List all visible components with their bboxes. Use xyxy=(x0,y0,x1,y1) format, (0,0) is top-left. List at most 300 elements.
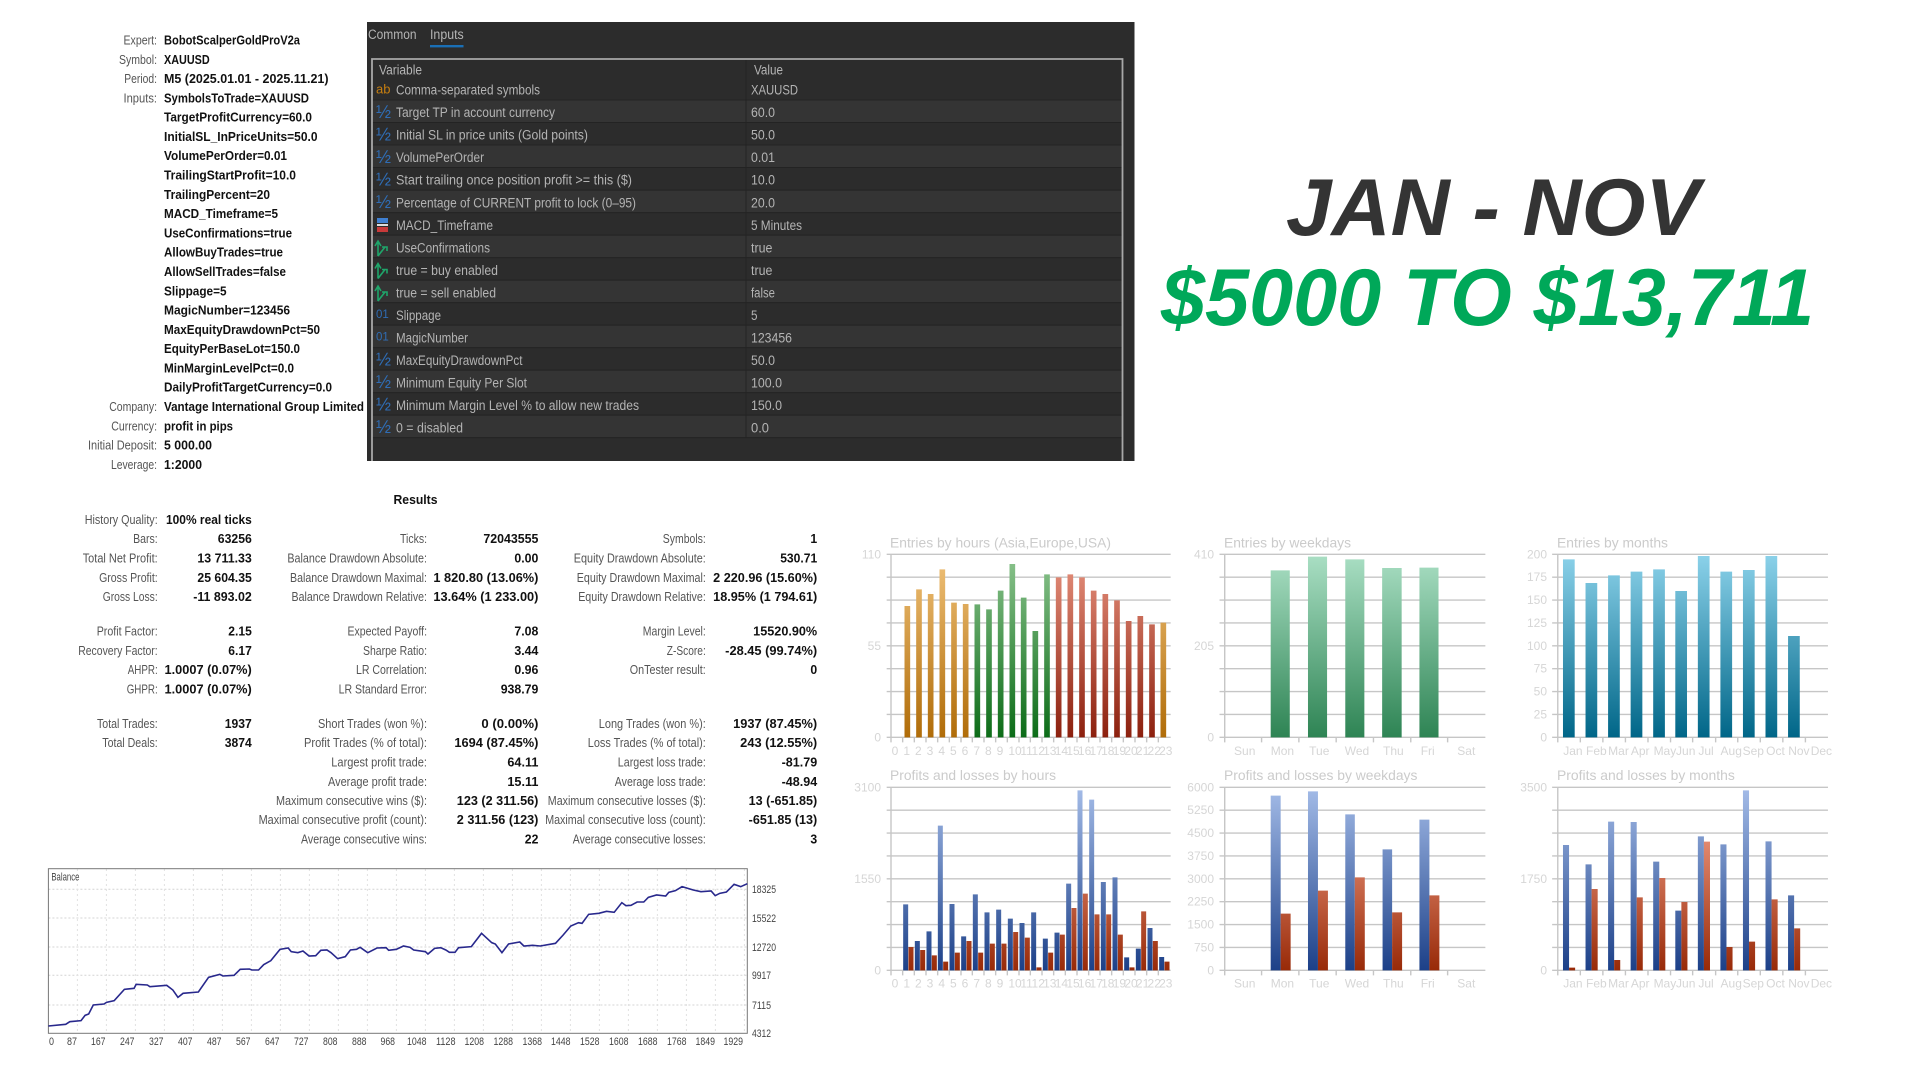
balance x axis: 1208 xyxy=(464,1036,484,1048)
x axis labels: Thu xyxy=(1383,744,1404,758)
column 3 values: 2 220.96 (15.60%) xyxy=(713,571,817,585)
plot xyxy=(887,787,1171,975)
column 2 labels: LR Correlation: xyxy=(356,663,427,677)
column 2 values: 7.08 xyxy=(514,624,538,638)
results heading: Results xyxy=(394,492,438,507)
y axis labels xyxy=(1187,780,1214,977)
column 3 labels: Symbols: xyxy=(663,532,706,546)
variable names: Variable xyxy=(379,63,422,78)
balance y axis: 4312 xyxy=(752,1028,771,1040)
setting values: InitialSL_InPriceUnits=50.0 xyxy=(164,130,318,144)
setting labels: Inputs: xyxy=(124,91,157,105)
icons: data types: ½ xyxy=(376,170,391,190)
column 1 values: 13 711.33 xyxy=(197,552,252,566)
x axis labels: 2 xyxy=(915,977,922,991)
column 3 values xyxy=(713,532,817,846)
balance x axis: 968 xyxy=(380,1036,395,1048)
x axis labels: 0 xyxy=(892,977,899,991)
column 2 labels: Balance Drawdown Relative: xyxy=(292,590,427,604)
x axis labels: 19 xyxy=(1113,744,1126,758)
column 2 values: 0.96 xyxy=(514,663,538,677)
column 2 values: 3.44 xyxy=(514,644,538,658)
x axis labels: Jun xyxy=(1676,977,1695,991)
column 2 labels: Profit Trades (% of total): xyxy=(304,736,427,750)
x axis labels: Nov xyxy=(1788,977,1810,991)
chart title: Profits and losses by weekdays xyxy=(1224,767,1417,783)
column 3 values: 13 (-651.85) xyxy=(749,794,817,808)
x axis labels: 16 xyxy=(1078,977,1092,991)
column 2 values: 1 820.80 (13.06%) xyxy=(433,571,538,585)
x axis labels: 20 xyxy=(1124,977,1138,991)
balance y axis: 15522 xyxy=(752,913,776,925)
x axis labels: 6 xyxy=(962,977,969,991)
x axis labels: Sep xyxy=(1743,744,1764,758)
column 3 values: -28.45 (99.74%) xyxy=(725,644,817,658)
setting values: XAUUSD xyxy=(164,53,210,67)
x axis labels: Feb xyxy=(1586,977,1607,991)
column 1 labels: Gross Loss: xyxy=(103,590,158,604)
balance x axis: 487 xyxy=(207,1036,222,1048)
variable names: VolumePerOrder xyxy=(396,150,484,165)
column 2 values: 123 (2 311.56) xyxy=(457,794,538,808)
column 3 labels: Equity Drawdown Absolute: xyxy=(574,552,706,566)
y axis labels: 75 xyxy=(1534,662,1547,676)
column 2 values: 13.64% (1 233.00) xyxy=(433,590,538,604)
plot xyxy=(1220,787,1485,975)
balance x axis: 1048 xyxy=(407,1036,426,1048)
column 1 values xyxy=(164,513,252,750)
plot xyxy=(1552,554,1828,742)
balance x axis: 1688 xyxy=(638,1036,658,1048)
x axis labels: 10 xyxy=(1008,977,1022,991)
variable names: MaxEquityDrawdownPct xyxy=(396,353,523,368)
balance x axis: 1528 xyxy=(580,1036,600,1048)
x axis labels: 22 xyxy=(1148,744,1161,758)
y axis labels: 0 xyxy=(1540,963,1547,977)
column 3 labels: Average loss trade: xyxy=(615,775,706,789)
column 3 labels: Z-Score: xyxy=(667,644,706,658)
column 2 labels: Ticks: xyxy=(400,532,427,546)
x axis labels: 2 xyxy=(915,744,922,758)
setting labels: Symbol: xyxy=(119,53,157,67)
variable names: Slippage xyxy=(396,308,441,323)
x axis labels: Jul xyxy=(1698,744,1714,758)
column 1 values: -11 893.02 xyxy=(193,590,252,604)
x axis labels: Wed xyxy=(1345,744,1369,758)
y axis labels: 1750 xyxy=(1520,872,1547,886)
balance x axis: 1768 xyxy=(667,1036,686,1048)
y axis labels: 50 xyxy=(1534,685,1547,699)
y axis labels: 175 xyxy=(1527,570,1547,584)
x axis labels: Apr xyxy=(1631,977,1650,991)
x axis labels: Tue xyxy=(1309,744,1330,758)
variable values: true xyxy=(751,263,772,278)
column 1 values: 25 604.35 xyxy=(197,571,252,585)
y axis labels: 3000 xyxy=(1187,872,1214,886)
setting values: M5 (2025.01.01 - 2025.11.21) xyxy=(164,72,328,86)
column 1 labels xyxy=(78,513,158,750)
y axis labels: 150 xyxy=(1527,593,1547,607)
column 2 values: 15.11 xyxy=(507,775,538,789)
y axis labels: 5250 xyxy=(1187,803,1214,817)
balance x axis: 1368 xyxy=(522,1036,542,1048)
x axis labels: Mar xyxy=(1608,977,1629,991)
column 1 values: 1937 xyxy=(225,717,252,731)
y axis labels: 750 xyxy=(1194,940,1214,954)
column 3 labels: OnTester result: xyxy=(630,663,706,677)
balance x axis: 327 xyxy=(149,1036,164,1048)
x axis labels: Sep xyxy=(1743,977,1764,991)
setting values: 1:2000 xyxy=(164,458,202,472)
title: period: JAN - NOV xyxy=(1286,163,1706,253)
x axis labels: Aug xyxy=(1721,977,1742,991)
x axis labels: 1 xyxy=(903,977,910,991)
balance x axis: 1849 xyxy=(696,1036,715,1048)
table rows xyxy=(372,60,1122,438)
x axis labels: 8 xyxy=(985,977,992,991)
column 3 labels: Long Trades (won %): xyxy=(599,717,706,731)
column 1 labels: Bars: xyxy=(133,532,158,546)
setting labels: Company: xyxy=(109,400,157,414)
x axis labels: 17 xyxy=(1090,977,1103,991)
balance x axis: 1448 xyxy=(551,1036,570,1048)
x axis labels xyxy=(1563,744,1832,758)
variable values: 123456 xyxy=(751,330,792,345)
variable values: false xyxy=(751,285,775,300)
x axis labels: 14 xyxy=(1055,744,1068,758)
setting labels: Currency: xyxy=(111,419,157,433)
tabs: Inputs xyxy=(430,27,464,42)
chart: profits and losses by hours xyxy=(854,767,1173,991)
column 1 labels: Total Deals: xyxy=(102,736,158,750)
y axis labels: 200 xyxy=(1527,547,1547,561)
x axis labels: 12 xyxy=(1032,744,1045,758)
column 1 values: 2.15 xyxy=(228,624,252,638)
y axis labels: 0 xyxy=(1207,963,1214,977)
column 1 labels: GHPR: xyxy=(127,682,158,696)
column 3 labels: Margin Level: xyxy=(643,624,706,638)
x axis labels: 8 xyxy=(985,744,992,758)
column 2 values: 938.79 xyxy=(501,682,538,696)
setting values: BobotScalperGoldProV2a xyxy=(164,34,301,48)
variable names: Minimum Equity Per Slot xyxy=(396,375,527,390)
x axis labels: Dec xyxy=(1811,744,1832,758)
variable names: true = buy enabled xyxy=(396,263,498,278)
panel: results table xyxy=(78,492,817,846)
icons: data types: ½ xyxy=(376,417,391,437)
column 3 labels: Maximum consecutive losses ($): xyxy=(548,794,706,808)
tabs xyxy=(368,27,464,47)
column 2 values: 0 (0.00%) xyxy=(481,717,538,731)
y axis labels: 1550 xyxy=(854,872,881,886)
x axis labels: Mar xyxy=(1608,744,1629,758)
panel: expert settings xyxy=(88,34,364,472)
variable names: 0 = disabled xyxy=(396,420,463,435)
x axis labels: Oct xyxy=(1766,744,1785,758)
variable values: 100.0 xyxy=(751,375,782,390)
balance x axis: 1288 xyxy=(494,1036,513,1048)
x axis labels: 4 xyxy=(938,977,945,991)
chart: entries by hours xyxy=(862,534,1173,758)
x axis labels: 15 xyxy=(1066,977,1080,991)
chart: entries by weekdays xyxy=(1194,534,1485,758)
variable values: 5 Minutes xyxy=(751,218,802,233)
column 3 values: 1937 (87.45%) xyxy=(733,717,817,731)
plot xyxy=(887,554,1171,742)
chart title: Entries by weekdays xyxy=(1224,534,1351,550)
setting values: UseConfirmations=true xyxy=(164,226,292,240)
icons: data types: ½ xyxy=(376,192,391,212)
x axis labels: 5 xyxy=(950,977,957,991)
variable names: Target TP in account currency xyxy=(396,105,555,120)
setting values: TargetProfitCurrency=60.0 xyxy=(164,111,312,125)
balance y axis: 18325 xyxy=(752,884,776,896)
column 2 values: 2 311.56 (123) xyxy=(457,813,538,827)
icons: data types: 01 xyxy=(376,332,389,344)
column 1 values: 100% real ticks xyxy=(166,513,252,527)
variable values: 60.0 xyxy=(751,105,775,120)
column 3 labels: Largest loss trade: xyxy=(618,756,706,770)
x axis labels: Fri xyxy=(1421,977,1435,991)
column 3 values: 530.71 xyxy=(780,552,817,566)
x axis labels: 13 xyxy=(1043,977,1057,991)
column 2 values: 0.00 xyxy=(514,552,538,566)
x axis labels: 6 xyxy=(962,744,969,758)
chart title: Profits and losses by months xyxy=(1557,767,1735,783)
x axis labels: 5 xyxy=(950,744,957,758)
chart title: Profits and losses by hours xyxy=(890,767,1056,783)
column 2 labels xyxy=(259,532,427,846)
column 2 labels: Balance Drawdown Absolute: xyxy=(287,552,427,566)
setting values: VolumePerOrder=0.01 xyxy=(164,149,287,163)
icons: data types: ½ xyxy=(376,102,391,122)
column 3 labels: Equity Drawdown Maximal: xyxy=(577,571,706,585)
column 1 labels: History Quality: xyxy=(85,513,158,527)
y axis labels xyxy=(1527,547,1547,744)
x axis labels xyxy=(1234,744,1476,758)
x axis labels: May xyxy=(1654,977,1676,991)
column 2 labels: Maximal consecutive profit (count): xyxy=(259,813,427,827)
y axis labels: 6000 xyxy=(1187,780,1214,794)
x axis labels xyxy=(892,977,1173,991)
column 1 labels: Recovery Factor: xyxy=(78,644,158,658)
balance x axis: 1128 xyxy=(436,1036,456,1048)
y axis labels xyxy=(1520,780,1547,977)
y axis labels: 25 xyxy=(1534,708,1547,722)
title: balance growth: $5000 TO $13,711 xyxy=(1160,253,1814,343)
x axis labels: 21 xyxy=(1136,977,1150,991)
column 1 labels: Total Net Profit: xyxy=(83,552,158,566)
column 3 labels: Average consecutive losses: xyxy=(573,832,706,846)
variable names: Initial SL in price units (Gold points) xyxy=(396,128,588,143)
table frame xyxy=(372,59,1122,461)
x axis labels: 11 xyxy=(1020,977,1033,991)
icons: data types xyxy=(375,82,391,437)
variable values xyxy=(751,63,802,435)
x axis labels: Mon xyxy=(1271,977,1294,991)
setting values: MinMarginLevelPct=0.0 xyxy=(164,361,294,375)
column 1 values: 6.17 xyxy=(228,644,252,658)
column 3 labels: Equity Drawdown Relative: xyxy=(578,590,706,604)
column 2 values: 22 xyxy=(525,832,538,846)
icons: data types: ½ xyxy=(376,350,391,370)
x axis labels: 17 xyxy=(1090,744,1103,758)
column 3 values: -81.79 xyxy=(782,756,817,770)
column 3 values: 1 xyxy=(810,532,817,546)
variable names: Start trailing once position profit >= this ($) xyxy=(396,173,632,188)
y axis labels xyxy=(1194,547,1214,744)
variable values: 20.0 xyxy=(751,195,775,210)
setting values: AllowSellTrades=false xyxy=(164,265,286,279)
column 2 values xyxy=(433,532,538,846)
column 2 labels: Short Trades (won %): xyxy=(318,717,427,731)
icons: data types: ab xyxy=(376,82,390,96)
column 3 values: -48.94 xyxy=(782,775,817,789)
column 1 values: 1.0007 (0.07%) xyxy=(164,682,252,696)
column 3 values: 18.95% (1 794.61) xyxy=(713,590,817,604)
y axis labels: 2250 xyxy=(1187,895,1214,909)
variable names: Percentage of CURRENT profit to lock (0–95) xyxy=(396,195,636,210)
x axis labels: Sun xyxy=(1234,977,1255,991)
column 3 labels: Maximal consecutive loss (count): xyxy=(545,813,706,827)
y axis labels: 55 xyxy=(868,639,881,653)
x axis labels: Jun xyxy=(1676,744,1695,758)
y axis labels: 0 xyxy=(1540,730,1547,744)
column 1 labels: AHPR: xyxy=(128,663,158,677)
setting values: MACD_Timeframe=5 xyxy=(164,207,278,221)
balance y axis: 12720 xyxy=(752,942,776,954)
x axis labels: Thu xyxy=(1383,977,1404,991)
column 2 labels: Maximum consecutive wins ($): xyxy=(276,794,427,808)
column 2 labels: Largest profit trade: xyxy=(331,756,427,770)
setting labels xyxy=(88,34,157,472)
variable values: 5 xyxy=(751,308,758,323)
column 2 values: 72043555 xyxy=(483,532,538,546)
variable values: 50.0 xyxy=(751,353,775,368)
x axis labels: 1 xyxy=(903,744,910,758)
chart title: Entries by months xyxy=(1557,534,1668,550)
x axis labels: 23 xyxy=(1159,744,1173,758)
x axis labels: Wed xyxy=(1345,977,1369,991)
y axis labels: 0 xyxy=(1207,730,1214,744)
x axis labels: Fri xyxy=(1421,744,1435,758)
variable values: 0.0 xyxy=(751,420,769,435)
icons: data types: ½ xyxy=(376,372,391,392)
y axis labels: 110 xyxy=(862,547,881,561)
y axis labels xyxy=(854,780,881,977)
variable names: Minimum Margin Level % to allow new trades xyxy=(396,398,639,413)
x axis labels: Mon xyxy=(1271,744,1294,758)
y axis labels: 410 xyxy=(1194,547,1214,561)
column 1 values: 63256 xyxy=(218,532,252,546)
column 3 values: 243 (12.55%) xyxy=(740,736,817,750)
x axis labels: Jan xyxy=(1563,977,1583,991)
variable names: Comma-separated symbols xyxy=(396,83,540,98)
x axis labels: 23 xyxy=(1159,977,1173,991)
y axis labels: 0 xyxy=(874,730,881,744)
column 1 labels: Total Trades: xyxy=(97,717,158,731)
tabs: Common xyxy=(368,27,416,42)
x axis labels: 19 xyxy=(1113,977,1126,991)
x axis labels: 12 xyxy=(1032,977,1045,991)
variable values: Value xyxy=(754,63,783,78)
x axis labels: 3 xyxy=(927,977,934,991)
x axis labels: 18 xyxy=(1101,744,1115,758)
x axis labels: 11 xyxy=(1020,744,1033,758)
x axis labels: Nov xyxy=(1788,744,1810,758)
column 3 values: 0 xyxy=(810,663,817,677)
balance x axis: 1929 xyxy=(724,1036,743,1048)
setting labels: Period: xyxy=(124,72,157,86)
x axis labels: Sat xyxy=(1457,744,1476,758)
icons: data types: ½ xyxy=(376,124,391,144)
y axis labels: 3750 xyxy=(1187,849,1214,863)
x axis labels: 4 xyxy=(938,744,945,758)
balance x axis: 167 xyxy=(91,1036,106,1048)
variable names: true = sell enabled xyxy=(396,285,496,300)
chart: entries by months xyxy=(1527,534,1832,758)
column 2 labels: Expected Payoff: xyxy=(348,624,427,638)
x axis labels: 7 xyxy=(973,744,980,758)
setting values: 5 000.00 xyxy=(164,439,212,453)
y axis labels: 1500 xyxy=(1187,918,1214,932)
balance line xyxy=(48,884,747,1026)
x axis labels: Jul xyxy=(1698,977,1714,991)
x axis labels xyxy=(1563,977,1832,991)
x axis labels: Apr xyxy=(1631,744,1650,758)
y axis labels: 3500 xyxy=(1520,780,1547,794)
x axis labels: Sat xyxy=(1457,977,1476,991)
variable values: 150.0 xyxy=(751,398,782,413)
column 2 labels: Balance Drawdown Maximal: xyxy=(290,571,427,585)
setting values: Slippage=5 xyxy=(164,284,227,298)
x axis labels: 15 xyxy=(1066,744,1080,758)
variable names: MACD_Timeframe xyxy=(396,218,493,233)
column 3 values: 15520.90% xyxy=(753,624,817,638)
column 2 values: 1694 (87.45%) xyxy=(454,736,538,750)
icons: data types: ½ xyxy=(376,147,391,167)
y axis labels: 3100 xyxy=(854,780,881,794)
balance x axis: 808 xyxy=(323,1036,338,1048)
column 2 labels: Average profit trade: xyxy=(328,775,427,789)
setting values: SymbolsToTrade=XAUUSD xyxy=(164,91,309,105)
x axis labels: 21 xyxy=(1136,744,1150,758)
x axis labels: Sun xyxy=(1234,744,1255,758)
x axis labels: 3 xyxy=(927,744,934,758)
variable values: 0.01 xyxy=(751,150,775,165)
plot xyxy=(1552,787,1828,975)
setting labels: Leverage: xyxy=(111,458,157,472)
setting values: Vantage International Group Limited xyxy=(164,400,364,414)
variable values: 10.0 xyxy=(751,173,775,188)
icons: data types: 01 xyxy=(376,309,389,321)
variable values: XAUUSD xyxy=(751,83,798,98)
variable names: MagicNumber xyxy=(396,330,468,345)
balance x axis xyxy=(49,1036,743,1048)
x axis labels: Jan xyxy=(1563,744,1583,758)
x axis labels: 7 xyxy=(973,977,980,991)
column 2 labels: LR Standard Error: xyxy=(339,682,427,696)
x axis labels: Tue xyxy=(1309,977,1330,991)
setting values: MaxEquityDrawdownPct=50 xyxy=(164,323,320,337)
balance x axis: 567 xyxy=(236,1036,250,1048)
balance x axis: 727 xyxy=(294,1036,308,1048)
variable values: true xyxy=(751,240,772,255)
setting values: AllowBuyTrades=true xyxy=(164,246,283,260)
y axis labels: 0 xyxy=(874,963,881,977)
x axis labels: 0 xyxy=(892,744,899,758)
chart: profits and losses by weekdays xyxy=(1187,767,1485,991)
